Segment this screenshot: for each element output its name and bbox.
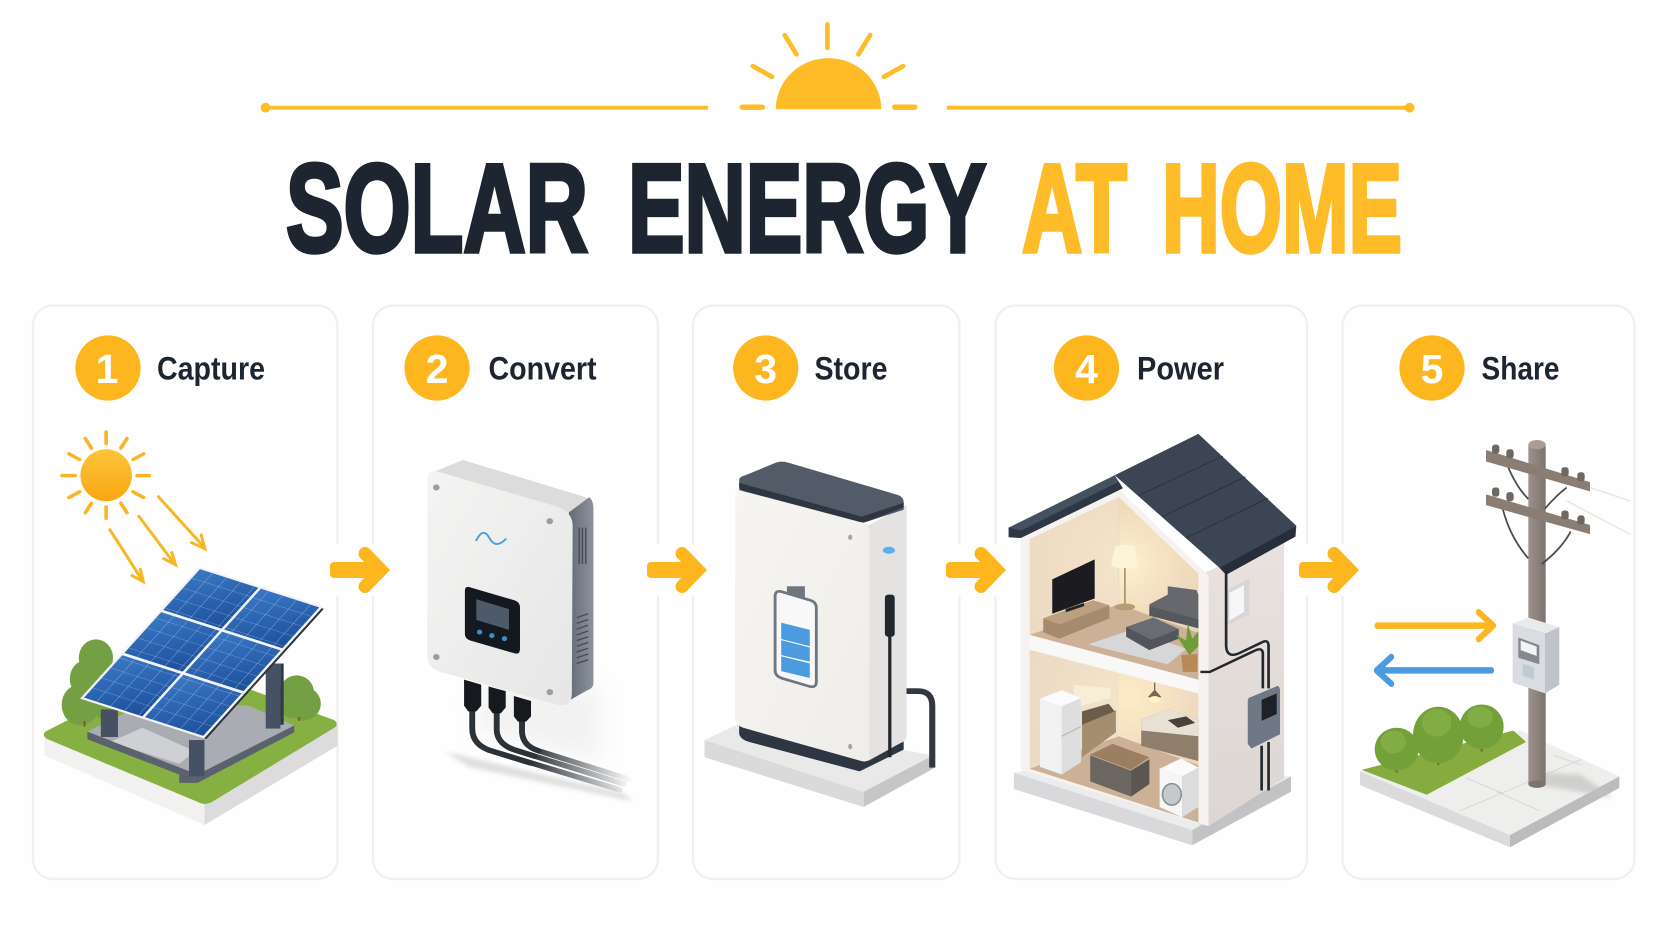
house foundation <box>1014 759 1291 845</box>
plant <box>1176 623 1198 672</box>
fridge <box>1040 690 1081 774</box>
panel: capture <box>33 306 338 879</box>
step 4 heading: Power <box>1137 350 1224 386</box>
icon: wave symbol <box>476 533 506 544</box>
ground platform <box>44 664 338 825</box>
title <box>286 140 1402 278</box>
sofa <box>1126 586 1198 650</box>
panel: share <box>1342 306 1634 879</box>
upper room <box>1030 497 1198 680</box>
title: ENERGY <box>628 140 986 278</box>
step 5 heading <box>1399 335 1560 401</box>
bushes <box>1375 704 1504 773</box>
arrow: power to share <box>1295 544 1365 596</box>
title: AT <box>1022 140 1127 278</box>
icon: battery level <box>775 586 816 687</box>
arrow: capture to convert <box>322 544 398 596</box>
connectors <box>464 680 531 722</box>
inverter casing <box>427 460 593 705</box>
step 1 heading: Capture <box>157 350 265 386</box>
house wiring <box>1200 571 1269 791</box>
utility pole <box>1486 440 1630 788</box>
icon: home battery <box>704 462 933 807</box>
panel: store <box>693 306 960 879</box>
title: SOLAR <box>286 140 588 278</box>
step 3 heading <box>733 335 888 401</box>
solar array <box>80 567 325 739</box>
house walls <box>1021 489 1284 826</box>
icon: solar panel scene <box>44 432 338 825</box>
panel: power <box>996 306 1307 879</box>
step 2 heading: 2 <box>426 346 448 392</box>
title: HOME <box>1162 140 1402 278</box>
screws <box>433 484 553 695</box>
header sun ornament <box>261 25 1415 113</box>
step 4 heading <box>1054 335 1224 401</box>
arrow: export to grid <box>1377 612 1493 639</box>
cabinets <box>1074 685 1198 761</box>
house roof <box>1009 434 1296 575</box>
step 2 heading: Convert <box>488 350 597 386</box>
trees <box>62 639 321 727</box>
panel: convert <box>373 306 658 879</box>
floor lamp <box>1111 545 1138 610</box>
concrete slab <box>87 698 294 783</box>
pendant light <box>1148 683 1162 703</box>
inverter display <box>465 587 520 654</box>
vents <box>577 528 588 664</box>
arrow: convert to store <box>639 544 715 596</box>
battery details <box>848 535 895 757</box>
washing machine <box>1160 758 1198 817</box>
support legs <box>101 664 284 776</box>
step 5 heading: Share <box>1482 350 1560 386</box>
step 4 heading: 4 <box>1075 346 1098 392</box>
step 2 heading <box>404 335 597 401</box>
battery casing <box>735 462 907 771</box>
icon: sun <box>62 432 149 518</box>
battery cable <box>904 691 932 768</box>
lower room <box>1030 650 1198 822</box>
cables <box>472 706 632 790</box>
step 3 heading: Store <box>814 350 888 386</box>
pavement base <box>1360 730 1619 847</box>
electric meter <box>1513 618 1559 693</box>
tv and console <box>1043 559 1109 639</box>
step 1 heading <box>75 335 265 401</box>
step 1 heading: 1 <box>96 346 118 392</box>
window <box>1228 579 1249 625</box>
sunlight arrows <box>110 497 205 582</box>
pole shadow <box>1528 773 1613 797</box>
icon: house cutaway <box>1009 434 1296 845</box>
step 5 heading: 5 <box>1421 346 1443 392</box>
floor slab <box>1030 636 1198 693</box>
arrow: import from grid <box>1377 657 1491 684</box>
step 3 heading: 3 <box>754 346 777 392</box>
icon: utility pole scene <box>1360 440 1630 847</box>
battery base <box>704 721 933 807</box>
arrow: store to power <box>938 544 1014 596</box>
icon: inverter <box>427 460 632 801</box>
island <box>1090 744 1149 797</box>
electric panel <box>1248 686 1280 748</box>
